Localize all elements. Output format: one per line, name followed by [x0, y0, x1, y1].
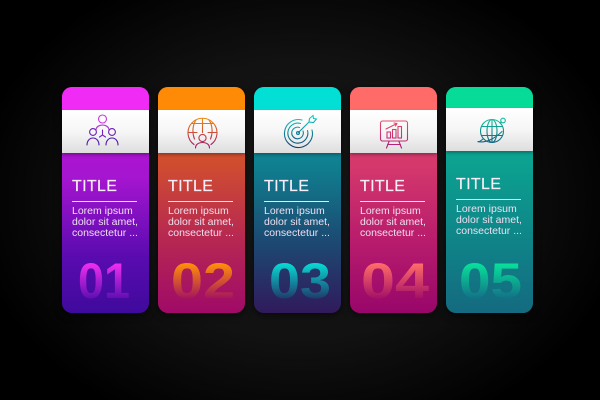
card 03 body text: consectetur ...: [264, 227, 330, 239]
card 01 body text: dolor sit amet,: [72, 216, 138, 228]
panel: card 05: [446, 87, 533, 313]
card 01 top tab: [62, 87, 149, 111]
panel: card 02: [158, 87, 245, 313]
card 02 rule: [168, 201, 233, 202]
card 03 top tab: [254, 87, 341, 111]
panel: card 04: [350, 87, 437, 313]
card 03 rule: [264, 201, 329, 202]
number 02: 02: [171, 253, 235, 309]
card 03 body text: Lorem ipsum: [264, 205, 325, 217]
number 04: 04: [361, 253, 429, 309]
card 02 body text: dolor sit amet,: [168, 216, 234, 228]
card 02 body text: Lorem ipsum: [168, 205, 229, 217]
card 03 title: TITLE: [264, 178, 309, 195]
card 01 body text: Lorem ipsum: [72, 205, 133, 217]
card 04 body text: dolor sit amet,: [360, 216, 426, 228]
card 05 body text: Lorem ipsum: [456, 203, 517, 215]
card 05 top tab: [446, 87, 533, 109]
card 05 body text: dolor sit amet,: [456, 214, 522, 226]
card 05 body text: [456, 203, 522, 237]
card 01 rule: [72, 201, 137, 202]
card 01 body text: consectetur ...: [72, 227, 138, 239]
card 05 title: TITLE: [456, 176, 501, 193]
card 03 body text: dolor sit amet,: [264, 216, 330, 228]
card 05 body text: consectetur ...: [456, 225, 522, 237]
card 02 title: TITLE: [168, 178, 213, 195]
card 03 body text: [264, 205, 330, 239]
card 02 body text: [168, 205, 234, 239]
card 02 body text: consectetur ...: [168, 227, 234, 239]
panel: card 03: [254, 87, 341, 313]
icon band 03: target with arrow: [254, 110, 341, 153]
icon band 01: people network: [62, 110, 149, 153]
icon band 02: globe with person: [158, 110, 245, 153]
number 03: 03: [269, 253, 331, 309]
card 01 body text: [72, 205, 138, 239]
card 02 top tab: [158, 87, 245, 111]
icon band 05: globe with orbit: [446, 108, 533, 151]
card 04 rule: [360, 201, 425, 202]
card 04 title: TITLE: [360, 178, 405, 195]
panel: card 01: [62, 87, 149, 313]
card 05 rule: [456, 199, 521, 200]
card 01 title: TITLE: [72, 178, 117, 195]
number 01: 01: [78, 253, 130, 309]
number 05: 05: [459, 253, 522, 309]
icon band 04: presentation board: [350, 110, 437, 153]
card 04 body text: [360, 205, 426, 239]
card 04 body text: consectetur ...: [360, 227, 426, 239]
card 04 top tab: [350, 87, 437, 111]
card 04 body text: Lorem ipsum: [360, 205, 421, 217]
